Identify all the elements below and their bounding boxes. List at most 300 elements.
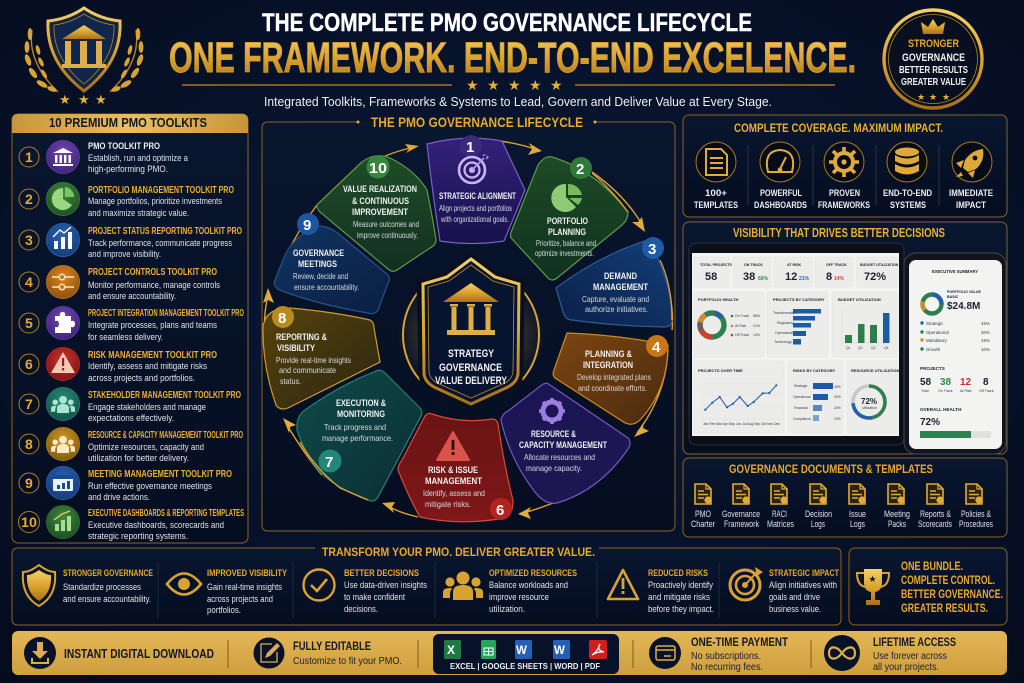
toolkit 4: PROJECT CONTROLS TOOLKIT PRO [88,267,217,278]
segment 1: strategic alignment: STRATEGIC ALIGNMENT [439,191,516,202]
instant digital download [24,637,214,669]
segment 9: governance meetings: Review, decide and [293,271,348,281]
document: meeting packs: Meeting [884,509,910,519]
segment 2: portfolio planning: PORTFOLIO [547,216,588,227]
benefit: better decisions [304,568,427,614]
tablet dashboard: 12 [785,271,797,283]
toolkit 2: and maximize strategic value. [88,208,189,218]
toolkit 9: and drive actions. [88,492,150,502]
tablet dashboard: 72% [861,397,877,406]
panel: visibility that drives better decisions [683,222,1007,454]
segment 4: planning and integration: INTEGRATION [583,360,633,371]
benefit: strategic impact: business value. [769,604,821,614]
toolkit 5: 5 [25,315,33,331]
document: issue logs: Issue [849,509,866,519]
segment 6: risk and issue management: Identify, assess and [423,488,485,498]
segment 10: value realization: IMPROVEMENT [352,207,408,218]
segment 8: reporting and visibility: status. [280,376,301,386]
tablet dashboard [689,243,904,445]
toolkit 7: 7 [25,396,33,412]
segment 5: resource and capacity management: Allocate resources and [524,452,595,462]
phone dashboard: 12 [960,377,972,388]
icon: trophy [857,569,889,605]
segment 8: reporting and visibility: VISIBILITY [277,343,315,354]
tablet dashboard: Regulatory [777,321,794,325]
segment 9: governance meetings: GOVERNANCE [293,248,344,259]
seal badge: GOVERNANCE [902,52,965,64]
toolkit 5: PROJECT INTEGRATION MANAGEMENT TOOLKIT PRO [88,308,244,319]
icon: dashboards: DASHBOARDS [754,199,807,210]
tablet dashboard: Q4 [884,346,889,350]
fully editable [254,638,402,668]
phone dashboard: Total [921,389,929,393]
tablet dashboard: Operational [793,395,811,399]
icon: frameworks [818,142,870,210]
tablet dashboard: Operational [775,331,793,335]
segment 5: resource and capacity management: manage capacity. [526,463,582,473]
benefit: better decisions: BETTER DECISIONS [344,568,419,579]
panel: one bundle callout: GREATER RESULTS. [901,603,988,615]
seal badge: BETTER RESULTS [899,65,968,76]
benefit: improved visibility: portfolios. [207,605,241,615]
tablet dashboard: Financial [794,406,808,410]
header emblem: shield with temple and laurels [24,8,144,107]
toolkit 2: Manage portfolios, prioritize investments [88,196,222,206]
segment 1: strategic alignment: with organizational goals. [440,214,509,224]
document: reports and scorecards: Scorecards [918,519,952,529]
icon: trophy: ★ [868,574,877,584]
segment 6: risk and issue management: 6 [496,502,504,519]
benefit: strategic impact: goals and drive [769,592,820,602]
panel: visibility that drives better decisions: VISIBILITY THAT DRIVES BETTER DECISIONS [733,226,945,240]
segment 10: value realization [317,156,436,271]
central shield: strategy, governance, value delivery [397,255,545,408]
segment 10: value realization: VALUE REALIZATION [343,184,417,195]
tablet dashboard: 40% [834,385,841,389]
tablet dashboard: BUDGET UTILIZATION [838,297,881,302]
segment 10: value realization: improve continuously. [357,230,418,240]
toolkit 1: Establish, run and optimize a [88,153,188,163]
phone dashboard: Off Track [979,389,994,393]
document: issue logs [849,484,866,529]
segment 4: planning and integration: and coordinate efforts. [578,383,647,393]
toolkit 4: and ensure accountability. [88,291,176,301]
tablet dashboard: PROJECTS OVER TIME [698,368,743,373]
file formats box [433,634,619,674]
tablet dashboard: TOTAL PROJECTS [700,263,733,267]
toolkit 2 [19,182,234,218]
tablet dashboard: 20% [834,406,841,410]
panel: complete coverage: COMPLETE COVERAGE. MAXIMUM IMPACT. [734,121,943,135]
document: decision logs [805,484,832,529]
toolkit 6: Identify, assess and mitigate risks [88,361,208,371]
segment 9: governance meetings: 9 [303,217,311,234]
tablet dashboard: Transformation [773,311,796,315]
phone dashboard: 58 [920,377,932,388]
title: ★ [487,77,500,93]
seal badge: ★ [917,92,925,102]
panel: governance documents and templates: GOVERNANCE DOCUMENTS & TEMPLATES [729,462,933,476]
toolkit 6: across projects and portfolios. [88,373,195,383]
toolkit 5 [19,306,244,342]
tablet dashboard: 14% [753,333,760,337]
segment 8: reporting and visibility: REPORTING & [276,332,327,343]
file formats box: W [516,645,527,657]
phone dashboard: At Risk [960,389,972,393]
document: meeting packs: Packs [888,519,906,529]
file formats box: EXCEL | GOOGLE SHEETS | WORD | PDF [450,662,600,671]
footer bar [12,631,1007,675]
tablet dashboard: 58 [705,271,717,283]
panel: 10 premium PMO toolkits: 10 PREMIUM PMO TOOLKITS [49,116,207,130]
icon: dashboards [754,142,807,210]
tablet dashboard: BUDGET UTILIZATION [860,263,899,267]
tablet dashboard: PORTFOLIO HEALTH [698,297,738,302]
tablet dashboard: Off Track [735,333,749,337]
central shield: strategy, governance, value delivery: GOVERNANCE [439,362,502,374]
phone dashboard: Strategic [926,321,944,326]
benefit: improved visibility: IMPROVED VISIBILITY [207,568,287,579]
document: meeting packs [884,484,910,529]
segment 8: reporting and visibility: 8 [278,310,286,327]
lifecycle heading: THE PMO GOVERNANCE LIFECYCLE [371,115,583,130]
document: policies and procedures: Procedures [959,519,993,529]
toolkit 7: STAKEHOLDER MANAGEMENT TOOLKIT PRO [88,390,241,401]
toolkit 9: 9 [25,475,33,491]
panel: PMO governance lifecycle wheel [262,115,675,531]
toolkit 9: MEETING MANAGEMENT TOOLKIT PRO [88,469,232,480]
benefit: strategic impact: Align initiatives with [769,580,837,590]
segment 9: governance meetings: MEETINGS [298,259,337,270]
segment 10: value realization: 10 [369,160,387,177]
benefit: reduced risks: and mitigate risks [648,592,710,602]
toolkit 1: PMO TOOLKIT PRO [88,141,160,152]
toolkit 10 [18,506,244,541]
tablet dashboard: 38 [743,271,755,283]
document: policies and procedures: Policies & [961,509,991,519]
tablet dashboard: AT RISK [787,263,802,267]
benefit: strategic impact [730,567,839,614]
document: RACI matrices: Matrices [767,519,794,529]
phone dashboard: 10% [981,347,990,352]
document: governance framework [722,484,760,529]
title: THE COMPLETE PMO GOVERNANCE LIFECYCLE [262,9,752,37]
segment 4: planning and integration: PLANNING & [585,349,632,360]
phone dashboard [904,253,1006,454]
benefit: stronger governance: Standardize processes [63,582,141,592]
subtitle: Integrated Toolkits, Frameworks & Systems to Lead, Govern and Deliver Value at Every Stage. [264,94,772,109]
lifetime access: Use forever across [873,651,947,662]
document: reports and scorecards: Reports & [920,509,951,519]
toolkit 2: 2 [25,191,33,207]
toolkit 9: Run effective governance meetings [88,481,213,491]
phone dashboard: PROJECTS [920,366,945,371]
tablet dashboard: 68% [753,314,760,318]
segment 2: portfolio planning: PLANNING [548,227,586,238]
segment 2: portfolio planning: 2 [576,161,584,178]
icon: frameworks: PROVEN [829,187,860,198]
segment 8: reporting and visibility [263,306,380,409]
toolkit 7: expectations effectively. [88,413,174,423]
tablet dashboard: Compliance [793,417,811,421]
segment 7: execution and monitoring: manage performance. [322,433,393,443]
title [169,9,856,93]
title: ★ [550,77,563,93]
central shield: strategy, governance, value delivery: STRATEGY [448,348,495,360]
header emblem: shield with temple and laurels: ★ [78,92,90,107]
file formats box: X [447,643,455,657]
segment 8: reporting and visibility: and communicate [279,365,336,375]
document: RACI matrices: RACI [772,509,787,519]
phone dashboard: 72% [920,417,940,428]
panel: one bundle callout: ONE BUNDLE. [901,561,963,573]
toolkit 9 [19,466,232,502]
tablet dashboard: 30% [834,395,841,399]
benefit: stronger governance: STRONGER GOVERNANCE [63,568,153,579]
phone dashboard: 30% [981,330,990,335]
benefit: strategic impact: STRATEGIC IMPACT [769,568,839,579]
seal badge: GREATER VALUE [901,77,966,88]
one-time payment: No subscriptions. [691,651,761,662]
segment 4: planning and integration: 4 [652,339,661,356]
document: PMO charter [691,484,715,529]
toolkit 8 [19,428,243,463]
title: ★ [529,77,542,93]
phone dashboard: 45% [981,321,990,326]
document: PMO charter: PMO [695,509,711,519]
benefit: optimized resources: Balance workloads and [489,580,568,590]
benefit: optimized resources: OPTIMIZED RESOURCES [489,568,577,579]
segment 1: strategic alignment: 1 [466,139,474,156]
tablet dashboard: RESOURCE UTILIZATION [851,368,899,373]
panel: complete coverage [683,115,1007,217]
phone dashboard: EXECUTIVE SUMMARY [932,269,978,274]
icon: impact rocket: IMPACT [956,199,986,210]
fully editable: FULLY EDITABLE [293,639,371,653]
phone dashboard: Growth [926,347,941,352]
tablet dashboard: RISKS BY CATEGORY [793,368,835,373]
file formats box: W [554,645,565,657]
benefit: improved visibility: across projects and [207,594,273,604]
benefit: optimized resources: utilization. [489,604,525,614]
toolkit 7: Engage stakeholders and manage [88,402,206,412]
document: RACI matrices [767,484,794,529]
benefit: improved visibility: Gain real-time insights [207,582,282,592]
toolkit 1: 1 [25,149,33,165]
tablet dashboard: 21% [753,324,760,328]
cycle arrows [263,141,672,519]
toolkit 3: Track performance, communicate progress [88,238,233,248]
segment 5: resource and capacity management: RESOURCE & [531,429,576,440]
panel: transform your PMO benefits [12,545,841,625]
segment 10: value realization: & CONTINUOUS [352,196,409,207]
document: governance framework: Framework [724,519,759,529]
toolkit 6 [19,348,217,383]
segment 3: demand management: authorize initiatives. [585,304,648,314]
icon: impact rocket [949,142,993,210]
segment 3: demand management: DEMAND [604,271,637,282]
panel: 10 premium PMO toolkits [12,114,248,543]
benefit: optimized resources: improve resource [489,592,549,602]
icon: frameworks: FRAMEWORKS [818,199,870,210]
instant digital download: INSTANT DIGITAL DOWNLOAD [64,646,214,661]
seal badge: ★ [929,92,937,102]
document: decision logs: Logs [811,519,825,529]
header emblem: shield with temple and laurels: ★ [95,92,107,107]
segment 4: planning and integration [553,333,668,424]
panel: governance documents and templates [683,458,1007,537]
tablet dashboard: 8 [826,271,832,283]
icon: impact rocket: IMMEDIATE [949,187,993,198]
document: PMO charter: Charter [691,519,715,529]
phone dashboard: Mandatory [926,338,948,343]
segment 7: execution and monitoring [297,370,422,501]
lifetime access [824,635,956,673]
toolkit 1: high-performing PMO. [88,164,168,174]
lifetime access: all your projects. [873,662,939,673]
segment 7: execution and monitoring: 7 [325,454,333,471]
segment 1: strategic alignment: Align projects and portfolios [439,203,512,213]
benefit: stronger governance [23,565,153,606]
segment 3: demand management: Capture, evaluate and [582,294,649,304]
benefit: reduced risks: before they impact. [648,604,714,614]
document: issue logs: Logs [850,519,865,529]
toolkit 1 [19,140,188,174]
benefit: stronger governance: and ensure accountability. [63,594,151,604]
one-time payment: ONE-TIME PAYMENT [691,635,789,649]
toolkit 8: RESOURCE & CAPACITY MANAGEMENT TOOLKIT PRO [88,430,243,441]
segment 6: risk and issue management [398,413,513,522]
icon: systems: END-TO-END [883,187,932,198]
toolkit 3: and improve visibility. [88,249,161,259]
tablet dashboard: On Track [735,314,749,318]
phone dashboard: 15% [981,338,990,343]
tablet dashboard: 72% [864,271,886,283]
segment 6: risk and issue management: mitigate risks. [425,499,471,509]
phone dashboard: Operational [926,330,949,335]
one-time payment: No recurring fees. [691,662,763,673]
phone dashboard: 8 [983,377,989,388]
tablet dashboard: OFF TRACK [826,263,847,267]
tablet dashboard: 21% [799,276,810,282]
tablet dashboard: 66% [758,276,769,282]
toolkit 10: 10 [21,514,37,530]
benefit: reduced risks: Proactively identify [648,580,713,590]
tablet dashboard: PROJECTS BY CATEGORY [773,297,825,302]
segment 4: planning and integration: Develop integrated plans [577,372,651,382]
central shield: strategy, governance, value delivery: VALUE DELIVERY [435,375,508,387]
header emblem: shield with temple and laurels: ★ [59,92,71,107]
segment 2: portfolio planning: Prioritize, balance and [536,238,596,248]
toolkit 6: 6 [25,356,33,372]
tablet dashboard: 10% [834,417,841,421]
benefit: better decisions: to make confident [344,592,405,602]
tablet dashboard: Q1 [846,346,851,350]
segment 3: demand management: 3 [648,241,656,258]
seal badge: ★ [942,92,950,102]
title: ★ [508,77,521,93]
phone dashboard: OVERALL HEALTH [920,407,962,412]
document: governance framework: Governance [722,509,760,519]
segment 8: reporting and visibility: Provide real-time insights [276,355,351,365]
segment 7: execution and monitoring: MONITORING [337,409,385,420]
icon: templates: 100+ [705,187,728,198]
segment 2: portfolio planning: optimize investments. [535,248,594,258]
seal badge [884,10,982,108]
segment 5: resource and capacity management [501,383,630,503]
fully editable: Customize to fit your PMO. [293,655,402,667]
phone dashboard: 38 [940,377,952,388]
toolkit 3: 3 [25,232,33,248]
benefit: better decisions: Use data-driven insights [344,580,427,590]
toolkit 10: EXECUTIVE DASHBOARDS & REPORTING TEMPLATES [88,508,244,519]
phone dashboard: BASIC [947,295,959,299]
toolkit 6: RISK MANAGEMENT TOOLKIT PRO [88,350,217,361]
phone dashboard: PORTFOLIO VALUE [947,290,981,294]
toolkit 7 [19,388,241,423]
icon: systems: SYSTEMS [890,199,926,210]
segment 9: governance meetings [274,213,390,314]
segment 6: risk and issue management: MANAGEMENT [425,476,482,487]
icon: dashboards: POWERFUL [760,187,802,198]
benefit: reduced risks: REDUCED RISKS [648,568,708,579]
tablet dashboard: Jan Feb Mar Apr May Jun Jul Aug Sep Oct Nov Dec [703,422,780,426]
segment 9: governance meetings: ensure accountability. [294,282,359,292]
toolkit 10: strategic reporting systems. [88,531,188,541]
tablet dashboard: Q3 [871,346,876,350]
tablet dashboard: Technology [774,340,792,344]
tablet dashboard: ON TRACK [744,263,763,267]
toolkit 5: Integrate processes, plans and teams [88,320,218,330]
one-time payment [649,635,789,673]
segment 5: resource and capacity management: CAPACITY MANAGEMENT [519,440,607,451]
lifetime access: LIFETIME ACCESS [873,635,956,649]
benefit: optimized resources [443,568,577,614]
segment 7: execution and monitoring: Track progress and [324,422,386,432]
benefit: reduced risks [608,568,714,614]
segment 7: execution and monitoring: EXECUTION & [336,398,386,409]
segment 2: portfolio planning [510,157,628,280]
toolkit 10: Executive dashboards, scorecards and [88,520,224,530]
toolkit 8: 8 [25,436,33,452]
toolkit 4 [19,266,221,301]
toolkit 4: 4 [25,274,33,290]
segment 1: strategic alignment [427,135,525,244]
toolkit 4: Monitor performance, manage controls [88,280,221,290]
toolkit 5: for seamless delivery. [88,332,163,342]
icon: systems [883,142,932,210]
tablet dashboard: Utilization [862,406,877,410]
phone dashboard: $24.8M [947,301,980,312]
segment 6: risk and issue management: RISK & ISSUE [428,465,478,476]
toolkit 3: PROJECT STATUS REPORTING TOOLKIT PRO [88,226,242,237]
icon: templates: TEMPLATES [694,199,738,210]
toolkit 3 [19,224,242,259]
document: reports and scorecards [918,484,952,529]
icon: templates [694,142,738,210]
tablet dashboard: 14% [834,276,845,282]
tablet dashboard: Q2 [858,346,863,350]
benefit: better decisions: decisions. [344,604,378,614]
tablet dashboard: Strategic [794,384,808,388]
tablet dashboard: At Risk [735,324,746,328]
title: ★ [466,77,479,93]
toolkit 8: utilization for better delivery. [88,453,189,463]
benefit: improved visibility [167,568,287,615]
toolkit 8: Optimize resources, capacity and [88,442,204,452]
panel: transform your PMO benefits: TRANSFORM YOUR PMO. DELIVER GREATER VALUE. [322,545,595,559]
seal badge: STRONGER [908,38,959,50]
